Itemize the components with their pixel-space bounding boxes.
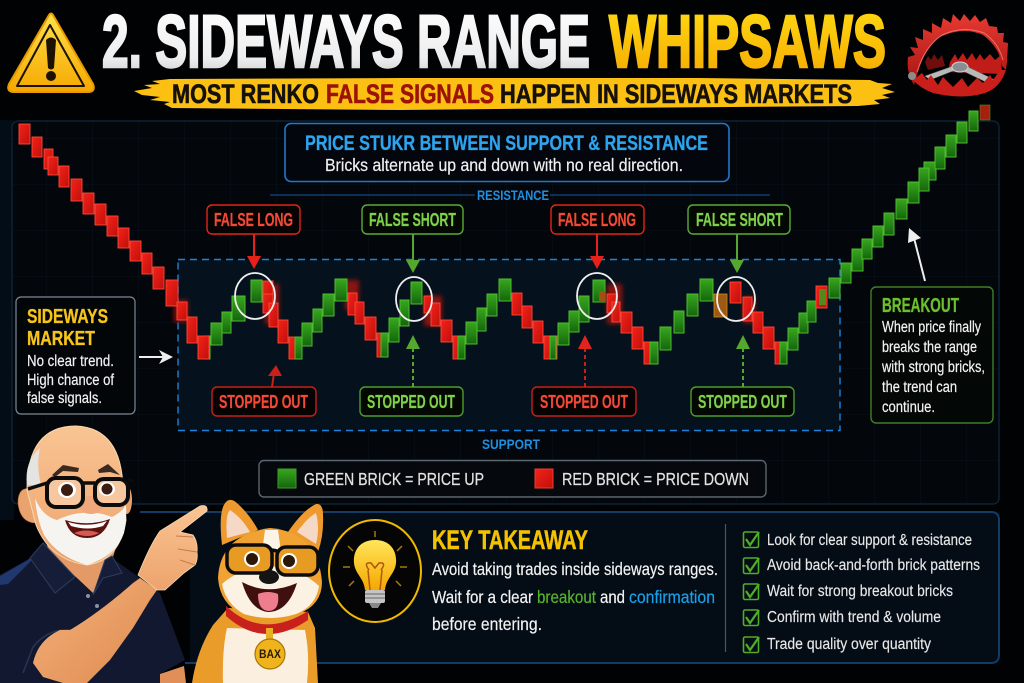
subtitle banner: [134, 78, 895, 110]
title: 2. SIDEWAYS RANGE: [102, 0, 590, 83]
panel: sideways market: SIDEWAYS: [27, 306, 108, 328]
character: bald man with glasses pointing: [0, 426, 207, 683]
callout: stopped out green 1: STOPPED OUT: [367, 392, 455, 412]
collar: [30, 543, 122, 595]
legend: red text: RED BRICK = PRICE DOWN: [562, 469, 749, 489]
name tag: BAX: [259, 647, 281, 661]
beard: [35, 498, 126, 565]
glasses: [28, 478, 133, 507]
panel: breakout: continue.: [882, 399, 935, 416]
nose: [79, 496, 103, 514]
panel: sideways market: No clear trend.: [27, 353, 114, 370]
legend: red swatch: [535, 469, 553, 488]
sideways whipsaw bricks: [187, 279, 816, 364]
callout: false short 2: [688, 205, 790, 273]
hand and pointing finger: [138, 506, 207, 590]
arrow: breakout pointer: [908, 228, 925, 281]
panel: breakout: breaks the range: [882, 339, 977, 356]
renko brick chart: [19, 105, 990, 364]
title: WHIPSAWS: [609, 0, 886, 83]
key takeaway text: and: [600, 587, 625, 607]
key takeaway text: confirmation: [629, 587, 715, 607]
key takeaway text: [432, 559, 718, 634]
falling red bricks: [19, 124, 187, 320]
callout: stopped out green 2: [691, 335, 794, 416]
rising breakout bricks: [816, 105, 990, 308]
support label: SUPPORT: [482, 436, 540, 452]
panel: price stuck heading: PRICE STUKR BETWEEN SUPPORT & RESISTANCE: [305, 132, 708, 155]
checklist: Trade quality over quantity: [767, 636, 931, 653]
head: [218, 528, 322, 618]
checklist: Avoid back-and-forth brick patterns: [767, 557, 980, 574]
checklist: [744, 532, 980, 653]
warning icon: [8, 14, 94, 92]
icon: light bulb: [329, 520, 421, 622]
arm: [33, 578, 157, 683]
callout: false long 1: FALSE LONG: [214, 210, 293, 230]
panel: price stuck heading: Bricks alternate up and down with no real direction.: [325, 155, 683, 175]
shirt: [0, 542, 185, 683]
mouth and tongue: [242, 582, 297, 612]
key takeaway text: before entering.: [432, 614, 542, 634]
panel: key takeaway: [140, 512, 999, 663]
sideways range dashed box: [178, 260, 840, 430]
callout: false short 2: FALSE SHORT: [696, 210, 783, 230]
key takeaway text: Avoid taking trades inside sideways ranges.: [432, 559, 718, 579]
panel: breakout: BREAKOUT: [882, 295, 959, 317]
ears: [18, 489, 35, 523]
collar: [226, 606, 308, 634]
upper jaw: [908, 14, 1008, 85]
legend: green text: GREEN BRICK = PRICE UP: [304, 469, 484, 489]
callout: false long 2: [551, 205, 644, 269]
panel: breakout: with strong bricks,: [881, 359, 985, 376]
subtitle banner: MOST RENKO: [172, 79, 319, 109]
neck: [44, 535, 120, 593]
callout: stopped out green 1: [360, 335, 463, 416]
panel: sideways market: High chance of: [27, 372, 115, 389]
panel: price stuck heading: [285, 124, 729, 182]
arrow: sideways market to range: [139, 350, 173, 364]
legend: [259, 460, 766, 497]
subtitle banner: FALSE SIGNALS: [326, 79, 494, 109]
panel: sideways market: MARKET: [27, 328, 95, 350]
name tag: [255, 628, 285, 669]
key takeaway heading: KEY TAKEAWAY: [432, 525, 588, 555]
body: [192, 608, 318, 683]
callout: false long 2: FALSE LONG: [558, 210, 636, 230]
callout: false short 1: [362, 205, 463, 273]
checklist: Wait for strong breakout bricks: [767, 583, 953, 600]
white highlight circles on false signals: [235, 273, 755, 321]
nose: [259, 570, 279, 584]
callout: false short 1: FALSE SHORT: [369, 210, 456, 230]
panel: breakout: the trend can: [882, 379, 957, 396]
sleeve hem: [23, 630, 72, 673]
mouth: [65, 519, 110, 538]
head: [27, 426, 126, 565]
callout: stopped out green 2: STOPPED OUT: [698, 392, 787, 412]
panel: main chart area: [12, 121, 999, 504]
legend: green swatch: [278, 469, 296, 488]
checklist: Look for clear support & resistance: [767, 532, 972, 549]
back plate with teeth: [948, 53, 1002, 74]
panel: breakout: When price finally: [882, 319, 981, 336]
silver cross arms: [925, 65, 995, 85]
other forearm at lower right: [160, 666, 186, 683]
icon: bear trap: [908, 14, 1008, 96]
ears: [221, 500, 258, 545]
callout: stopped out red 2: [532, 335, 636, 416]
subtitle banner: HAPPEN IN SIDEWAYS MARKETS: [500, 79, 852, 109]
callout: false long 1: [207, 205, 300, 269]
callout: stopped out red 2: STOPPED OUT: [540, 392, 628, 412]
panel: sideways market: false signals.: [27, 390, 102, 407]
resistance label and line: RESISTANCE: [477, 187, 549, 203]
eyebrows: [52, 464, 120, 477]
character: corgi dog with glasses: [192, 500, 323, 683]
panel: breakout: [871, 287, 993, 423]
key takeaway text: Wait for a clear: [432, 587, 533, 607]
panel: sideways market: [16, 297, 135, 414]
key takeaway text: breakout: [537, 587, 596, 607]
lower jaw: [913, 70, 1006, 96]
callout: stopped out red 1: [212, 365, 316, 416]
callout: stopped out red 1: STOPPED OUT: [219, 392, 308, 412]
checklist: Confirm with trend & volume: [767, 609, 941, 626]
dog glasses: [227, 545, 318, 575]
